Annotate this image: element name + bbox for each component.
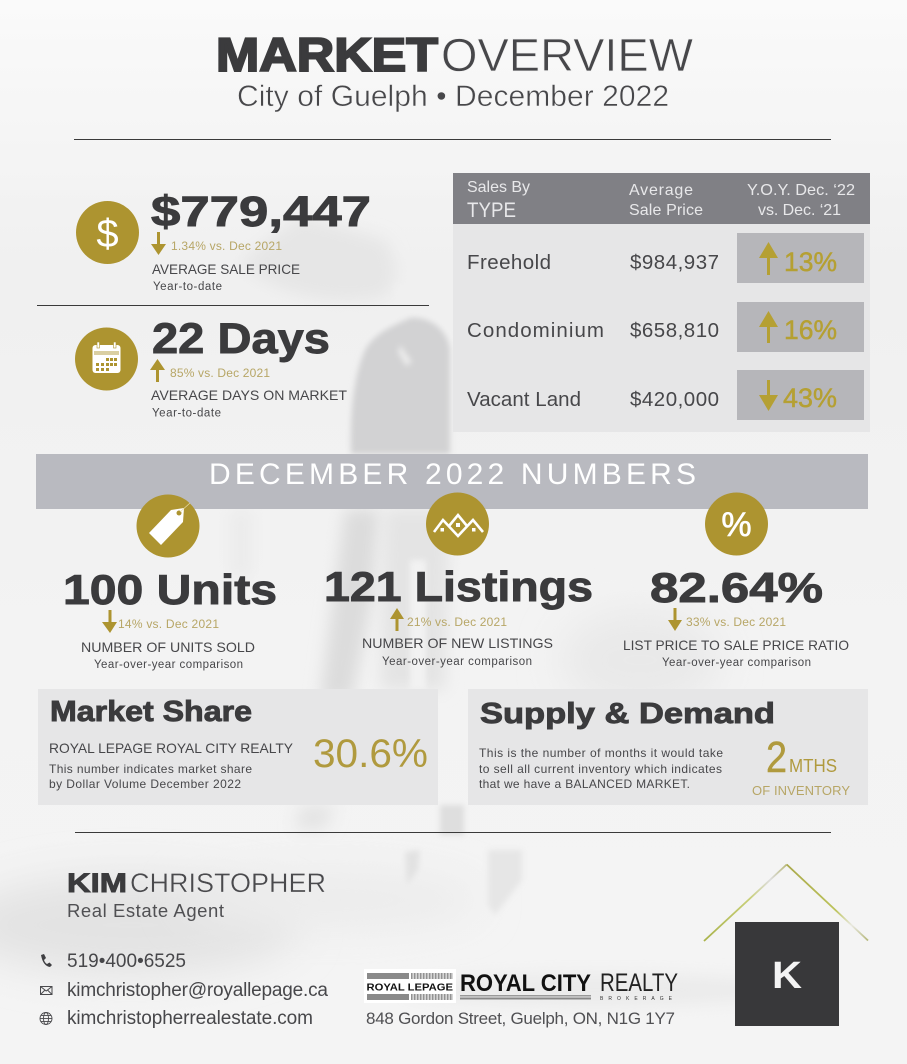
- heading: Supply & Demand: [480, 698, 775, 730]
- description: This number indicates market share: [49, 762, 252, 776]
- value: 30.6%: [313, 732, 428, 776]
- row: condominium: Condominium: [467, 319, 604, 342]
- row: freehold: [467, 233, 864, 283]
- arrow up: [390, 608, 404, 631]
- value: 100 Units: [63, 566, 277, 613]
- banner: december 2022 numbers: DECEMBER 2022 NUMBERS: [209, 458, 696, 491]
- icon: envelope: [40, 986, 52, 994]
- row: condominium: 16%: [784, 315, 837, 345]
- row: condominium: $658,810: [630, 319, 719, 342]
- arrow down: [102, 610, 117, 633]
- logo: royal lepage royal city realty: BROKERAGE: [600, 996, 673, 1002]
- value: MTHS: [789, 756, 837, 776]
- change text: 14% vs. Dec 2021: [118, 617, 219, 631]
- description: [49, 762, 252, 791]
- note: Year-to-date: [153, 281, 222, 293]
- label: NUMBER OF NEW LISTINGS: [362, 635, 553, 651]
- row: freehold: 13%: [784, 247, 837, 277]
- value: OF INVENTORY: [752, 783, 850, 798]
- logo: royal lepage royal city realty: ROYAL CITY: [460, 970, 591, 997]
- value: [752, 733, 850, 798]
- value: 22 Days: [152, 315, 330, 363]
- contact: email: kimchristopher@royallepage.ca: [67, 980, 328, 1001]
- icon: percent: %: [721, 506, 752, 544]
- contact: website: kimchristopherrealestate.com: [67, 1008, 313, 1029]
- icon: percent: [705, 492, 768, 556]
- row: vacant land: Vacant Land: [467, 388, 581, 411]
- row: freehold: $984,937: [630, 251, 719, 274]
- value: $779,447: [151, 188, 371, 236]
- change text: 21% vs. Dec 2021: [407, 615, 507, 629]
- stat: new listings: [324, 492, 593, 668]
- logo: royal lepage royal city realty: REALTY: [600, 969, 678, 997]
- label: AVERAGE DAYS ON MARKET: [151, 387, 347, 403]
- arrow down: [151, 232, 166, 255]
- agent name: CHRISTOPHER: [130, 868, 326, 898]
- subtitle: City of Guelph • December 2022: [237, 80, 669, 113]
- logo: k house: [704, 864, 868, 1026]
- label: AVERAGE SALE PRICE: [152, 261, 300, 277]
- panel: sales by type table: [453, 173, 870, 432]
- title: MARKET: [216, 28, 438, 81]
- value: 121 Listings: [324, 563, 593, 610]
- title: OVERVIEW: [441, 29, 694, 81]
- description: [479, 746, 723, 791]
- row: vacant land: $420,000: [630, 388, 719, 411]
- table header: Sale Price: [629, 202, 703, 219]
- icon: price tag: [136, 494, 200, 558]
- change text: 1.34% vs. Dec 2021: [171, 239, 282, 253]
- icon: globe: [40, 1012, 52, 1024]
- brokerage name: ROYAL LEPAGE ROYAL CITY REALTY: [49, 740, 294, 756]
- icon: dollar sign: $: [96, 212, 119, 256]
- table header: Y.O.Y. Dec. ‘22: [747, 182, 855, 199]
- icon: house roofs: [426, 492, 489, 556]
- note: Year-over-year comparison: [662, 657, 811, 669]
- change text: 85% vs. Dec 2021: [170, 366, 270, 380]
- label: LIST PRICE TO SALE PRICE RATIO: [623, 637, 849, 653]
- title: [216, 28, 694, 81]
- stat: list to sale price ratio: [623, 492, 849, 669]
- label: NUMBER OF UNITS SOLD: [81, 639, 255, 655]
- agent name: KIM: [67, 868, 127, 898]
- note: Year-to-date: [152, 408, 221, 420]
- icon: phone: [41, 954, 52, 967]
- contact: phone: 519•400•6525: [67, 951, 186, 972]
- description: that we have a BALANCED MARKET.: [479, 777, 690, 791]
- row: freehold: Freehold: [467, 251, 551, 274]
- heading: Market Share: [50, 696, 252, 728]
- table header: [453, 173, 870, 224]
- table header: Average: [629, 182, 693, 199]
- arrow down: [668, 608, 682, 631]
- panel: supply and demand: [468, 689, 868, 805]
- value: 82.64%: [650, 564, 823, 611]
- logo: royal lepage royal city realty: ROYAL LEPAGE: [366, 982, 453, 994]
- description: by Dollar Volume December 2022: [49, 777, 241, 791]
- stat: units sold: [63, 494, 277, 671]
- description: This is the number of months it would take: [479, 746, 723, 760]
- table header: TYPE: [467, 199, 516, 222]
- panel: market share: [38, 689, 438, 805]
- icon: calendar: [75, 328, 138, 390]
- row: vacant land: [467, 370, 864, 420]
- icon: dollar sign: [76, 201, 139, 264]
- description: to sell all current inventory which indicates: [479, 762, 722, 776]
- row: condominium: [467, 302, 864, 352]
- banner: december 2022 numbers: [36, 454, 868, 509]
- stat: average sale price: [76, 188, 371, 293]
- stat: average days on market: [75, 315, 347, 420]
- note: Year-over-year comparison: [94, 659, 243, 671]
- logo: royal lepage royal city realty: [364, 969, 678, 1003]
- office address: 848 Gordon Street, Guelph, ON, N1G 1Y7: [366, 1009, 675, 1028]
- change text: 33% vs. Dec 2021: [686, 615, 786, 629]
- value: 2: [766, 733, 787, 782]
- arrow up: [150, 359, 165, 382]
- note: Year-over-year comparison: [382, 656, 532, 668]
- agent title: Real Estate Agent: [67, 900, 224, 921]
- row: vacant land: 43%: [783, 383, 837, 413]
- logo: k house: K: [772, 955, 803, 997]
- table header: Sales By: [467, 179, 530, 196]
- table header: vs. Dec. ‘21: [758, 202, 841, 219]
